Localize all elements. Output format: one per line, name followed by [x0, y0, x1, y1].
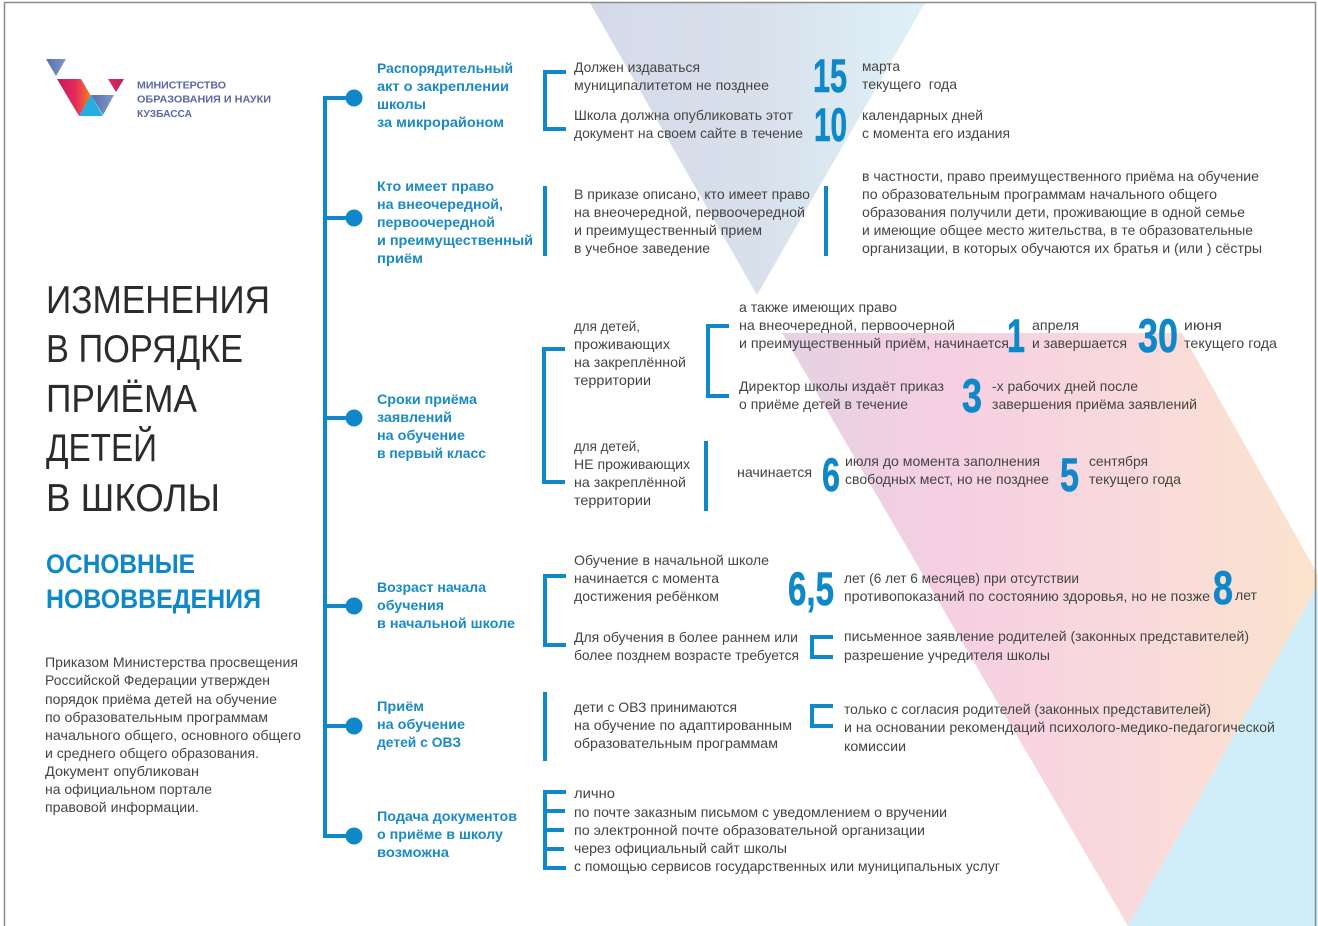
panel: children with disabilities details: и на основании рекомендаций психолого-медико-педагогической [844, 719, 1275, 735]
panel: application deadlines details: и преимущественный приём, начинается [739, 335, 1009, 351]
panel: submission methods list: лично [574, 785, 615, 801]
panel: starting age details: более позднем возрасте требуется [574, 647, 799, 663]
panel: application deadlines details: 6 [822, 448, 840, 501]
timeline spine with nodes [325, 90, 362, 844]
heading: starting age: Возраст начала [377, 579, 486, 595]
subtitle: НОВОВВЕДЕНИЯ [46, 584, 261, 614]
panel: starting age details: письменное заявление родителей (законных представителей) [844, 628, 1249, 644]
panel: application deadlines details: для детей, [574, 318, 640, 334]
panel: application deadlines details: 30 [1138, 309, 1178, 362]
title: ИЗМЕНЕНИЯ [46, 279, 270, 322]
title: ПРИЁМА [46, 378, 197, 421]
panel: priority rights details: образования получили дети, проживающие в одной семье [862, 204, 1245, 220]
panel: application deadlines details: НЕ проживающих [574, 456, 690, 472]
panel: application deadlines details: и завершается [1032, 335, 1127, 351]
subtitle [46, 549, 261, 614]
panel: application deadlines details: на внеочередной, первоочерной [739, 317, 955, 333]
panel: priority rights details: на внеочередной, первоочередной [574, 204, 805, 220]
background shape: pink [782, 333, 1318, 926]
panel: application deadlines details: июля до момента заполнения [845, 453, 1040, 469]
panel: submission methods list: по почте заказным письмом с уведомлением о вручении [574, 804, 947, 820]
panel: application deadlines details: территории [574, 372, 651, 388]
background triangle: light blue [1128, 585, 1318, 926]
heading: application deadlines: на обучение [377, 427, 465, 443]
panel: order publication deadlines: 15 [813, 49, 847, 102]
heading: starting age: в начальной школе [377, 615, 515, 631]
intro text: Документ опубликован [45, 763, 199, 779]
intro text: правовой информации. [45, 799, 199, 815]
panel: starting age details: 6,5 [788, 562, 834, 615]
panel: starting age details: лет [1235, 587, 1258, 603]
panel: application deadlines details: а также имеющих право [739, 299, 897, 315]
panel: starting age details: Для обучения в более раннем или [574, 629, 798, 645]
heading: submitting documents: Подача документов [377, 808, 517, 824]
heading: children with disabilities: детей с ОВЗ [377, 734, 461, 750]
panel: priority rights details [545, 168, 1262, 256]
panel: order publication deadlines: календарных дней [862, 107, 983, 123]
panel: application deadlines details: 1 [1007, 309, 1025, 362]
panel: application deadlines details: Директор школы издаёт приказ [739, 378, 944, 394]
subtitle: ОСНОВНЫЕ [46, 549, 195, 579]
heading: starting age [377, 579, 515, 631]
panel: application deadlines details: текущего года [1184, 335, 1277, 351]
heading: priority rights: первоочередной [377, 214, 495, 230]
panel: order publication deadlines: Школа должна опубликовать этот [574, 107, 794, 123]
heading: submitting documents: о приёме в школу [377, 826, 503, 842]
panel: application deadlines details: -х рабочих дней после [992, 378, 1138, 394]
panel: application deadlines details: завершения приёма заявлений [992, 396, 1197, 412]
logo: ОБРАЗОВАНИЯ И НАУКИ [137, 94, 271, 106]
panel: priority rights details: в частности, право преимущественного приёма на обучение [862, 168, 1259, 184]
panel: application deadlines details: 3 [962, 369, 982, 422]
intro text: и среднего общего образования. [45, 745, 259, 761]
heading: priority rights: приём [377, 250, 423, 266]
panel: priority rights details: В приказе описано, кто имеет право [574, 186, 810, 202]
panel: starting age details [545, 552, 1258, 663]
panel: children with disabilities details [545, 692, 1275, 761]
panel: starting age details: 8 [1213, 561, 1233, 614]
heading: children with disabilities [377, 698, 465, 750]
heading: priority rights: и преимущественный [377, 232, 533, 248]
panel: submission methods list: по электронной почте образовательной организации [574, 822, 925, 838]
panel: application deadlines details: проживающих [574, 336, 670, 352]
intro text [45, 654, 301, 815]
heading: application deadlines: Сроки приёма [377, 391, 477, 407]
panel: starting age details: начинается с момента [574, 570, 719, 586]
heading: priority rights: на внеочередной, [377, 196, 503, 212]
heading: children with disabilities: на обучение [377, 716, 465, 732]
intro text: на официальном портале [45, 781, 212, 797]
panel: submission methods list: с помощью сервисов государственных или муниципальных услуг [574, 858, 1000, 874]
heading: application deadlines: заявлений [377, 409, 452, 425]
panel: order publication deadlines: документ на своем сайте в течение [574, 125, 803, 141]
panel: application deadlines details: текущего года [1089, 471, 1181, 487]
panel: order publication deadlines: текущего года [862, 76, 957, 92]
panel: order publication deadlines [545, 49, 1010, 151]
panel: starting age details: разрешение учредителя школы [844, 647, 1050, 663]
panel: children with disabilities details: комиссии [844, 738, 906, 754]
heading: priority rights [377, 178, 533, 266]
panel: order publication deadlines: марта [862, 58, 900, 74]
heading: order on assignment: акт о закреплении [377, 78, 509, 94]
panel: order publication deadlines: муниципалитетом не позднее [574, 77, 769, 93]
panel: children with disabilities details: на обучение по адаптированным [574, 717, 792, 733]
panel: submission methods list: через официальный сайт школы [574, 840, 787, 856]
panel: order publication deadlines: Должен издаваться [574, 59, 700, 75]
intro text: Российской Федерации утвержден [45, 672, 270, 688]
panel: children with disabilities details: дети с ОВЗ принимаются [574, 699, 737, 715]
panel: application deadlines details: начинается [737, 464, 812, 480]
panel: application deadlines details: сентября [1089, 453, 1148, 469]
panel: order publication deadlines: 10 [814, 98, 847, 151]
background triangle: top [590, 3, 925, 295]
panel: application deadlines details: о приёме детей в течение [739, 396, 908, 412]
panel: application deadlines details: 5 [1060, 448, 1079, 501]
title [46, 279, 270, 520]
heading: submitting documents: возможна [377, 844, 449, 860]
panel: children with disabilities details: образовательным программам [574, 735, 778, 751]
logo [46, 59, 271, 120]
panel: application deadlines details: апреля [1032, 317, 1079, 333]
panel: application deadlines details [544, 299, 1277, 511]
panel: starting age details: достижения ребёнком [574, 588, 719, 604]
title: ДЕТЕЙ [46, 425, 157, 470]
panel: order publication deadlines: с момента его издания [862, 125, 1010, 141]
panel: application deadlines details: территории [574, 492, 651, 508]
intro text: Приказом Министерства просвещения [45, 654, 298, 670]
panel: application deadlines details: июня [1184, 317, 1222, 333]
title: В ШКОЛЫ [46, 477, 220, 520]
heading: order on assignment: школы [377, 96, 426, 112]
panel: priority rights details: в учебное заведение [574, 240, 710, 256]
panel: priority rights details: и преимущественный прием [574, 222, 762, 238]
panel: starting age details: Обучение в начальной школе [574, 552, 769, 568]
heading: order on assignment: за микрорайоном [377, 114, 504, 130]
panel: starting age details: противопоказаний по состоянию здоровья, но не позже [844, 588, 1210, 604]
intro text: порядок приёма детей на обучение [45, 691, 277, 707]
panel: priority rights details: и имеющие общее место жительства, в те образовательные [862, 222, 1253, 238]
intro text: начального общего, основного общего [45, 727, 301, 743]
panel: starting age details: лет (6 лет 6 месяцев) при отсутствии [844, 570, 1079, 586]
heading: order on assignment [377, 60, 513, 130]
panel: application deadlines details: на закреплённой [574, 354, 686, 370]
heading: starting age: обучения [377, 597, 444, 613]
panel: priority rights details: по образовательным программам начального общего [862, 186, 1217, 202]
title: В ПОРЯДКЕ [46, 328, 243, 371]
panel: submission methods list [545, 785, 1000, 874]
heading: children with disabilities: Приём [377, 698, 424, 714]
heading: submitting documents [377, 808, 517, 860]
heading: application deadlines: в первый класс [377, 445, 486, 461]
logo: МИНИСТЕРСТВО [137, 80, 226, 92]
heading: order on assignment: Распорядительный [377, 60, 513, 76]
panel: application deadlines details: для детей, [574, 438, 640, 454]
logo: КУЗБАССА [137, 108, 192, 120]
panel: priority rights details: организации, в которых обучаются их братья и (или ) сёстры [862, 240, 1262, 256]
heading: priority rights: Кто имеет право [377, 178, 494, 194]
intro text: по образовательным программам [45, 709, 268, 725]
heading: application deadlines [377, 391, 486, 461]
panel: application deadlines details: на закреплённой [574, 474, 686, 490]
panel: children with disabilities details: только с согласия родителей (законных представителей) [844, 701, 1211, 717]
panel: application deadlines details: свободных мест, но не позднее [845, 471, 1049, 487]
